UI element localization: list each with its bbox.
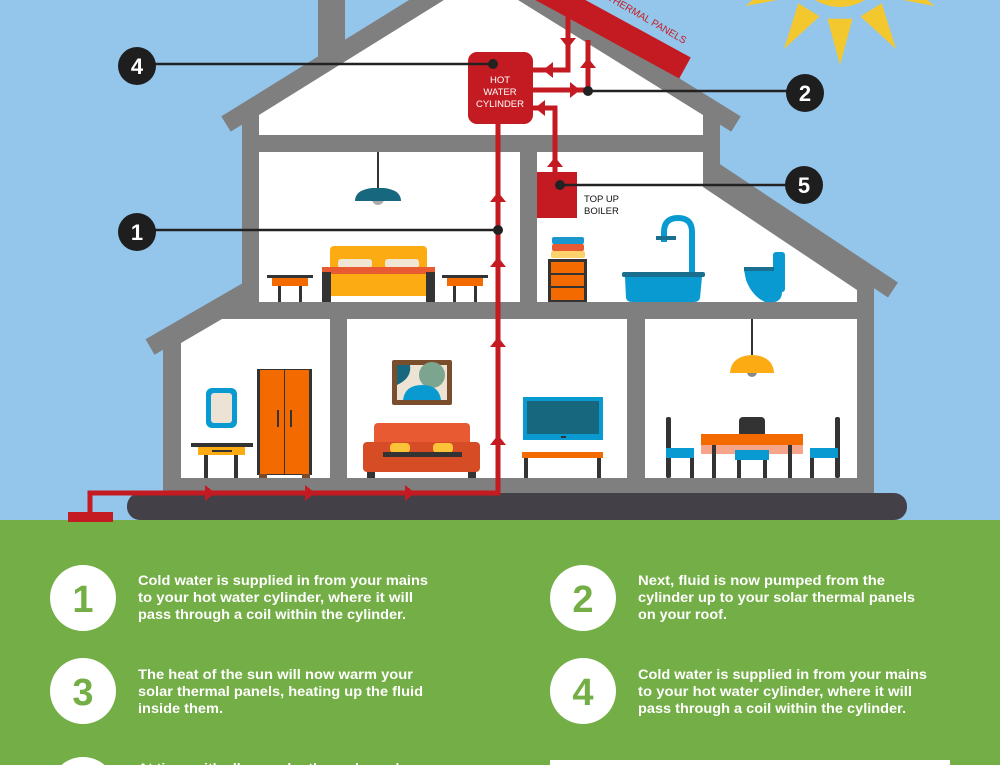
callout 2: 2 bbox=[799, 81, 811, 106]
hot water cylinder bbox=[468, 52, 533, 124]
top up boiler: BOILER bbox=[584, 206, 619, 217]
step 1: to your hot water cylinder, where it will bbox=[138, 589, 413, 605]
step 3 bbox=[50, 658, 423, 724]
callout 4: 4 bbox=[131, 54, 144, 79]
step 1: Cold water is supplied in from your mains bbox=[138, 572, 428, 588]
pipe arrows bbox=[205, 38, 596, 501]
icon: mirror bbox=[206, 388, 237, 428]
step 1 bbox=[50, 565, 428, 631]
pipes bbox=[90, 0, 588, 514]
icon: picture frame bbox=[392, 360, 452, 405]
icon: side table downstairs bbox=[191, 443, 253, 478]
step 1: 1 bbox=[72, 579, 94, 621]
foundation bar bbox=[127, 493, 907, 520]
icon: dining table and chairs bbox=[666, 417, 840, 478]
step 4: pass through a coil within the cylinder. bbox=[638, 700, 906, 716]
icon: wardrobe bbox=[257, 369, 312, 478]
step 4: Cold water is supplied in from your mains bbox=[638, 666, 927, 682]
step 3: solar thermal panels, heating up the fluid bbox=[138, 683, 423, 699]
step 2 bbox=[550, 565, 915, 631]
icon: ceiling lamp upstairs bbox=[355, 152, 401, 205]
icon: side tables bbox=[267, 275, 488, 302]
step 4: 4 bbox=[572, 672, 594, 714]
callout 1 bbox=[118, 213, 503, 251]
step 2: 2 bbox=[572, 579, 594, 621]
step 2: cylinder up to your solar thermal panels bbox=[638, 589, 915, 605]
icon: bathtub with shower bbox=[622, 218, 705, 302]
icon: sofa bbox=[363, 423, 480, 478]
step 3: 3 bbox=[72, 672, 94, 714]
hot water cylinder: CYLINDER bbox=[476, 99, 524, 110]
step 2: Next, fluid is now pumped from the bbox=[638, 572, 885, 588]
ground green bbox=[0, 520, 1000, 765]
step 4: to your hot water cylinder, where it will bbox=[638, 683, 912, 699]
icon: bed bbox=[322, 246, 435, 302]
icon: tv bbox=[522, 397, 603, 478]
callout 1: 1 bbox=[131, 220, 143, 245]
mains inlet block bbox=[68, 512, 113, 522]
hot water cylinder: HOT bbox=[490, 75, 510, 86]
callout 5: 5 bbox=[798, 173, 810, 198]
top up boiler bbox=[537, 172, 619, 218]
solar thermal panels bbox=[520, 0, 688, 68]
sky bbox=[0, 0, 1000, 520]
step 1: pass through a coil within the cylinder. bbox=[138, 606, 406, 622]
icon: sun bbox=[746, 0, 934, 65]
step 3: inside them. bbox=[138, 700, 223, 716]
callout 5 bbox=[555, 166, 823, 204]
callout 4 bbox=[118, 47, 498, 85]
step 4 bbox=[550, 658, 927, 724]
white box bottom right bbox=[550, 760, 950, 765]
top up boiler: TOP UP bbox=[584, 194, 619, 205]
icon: dresser with towels bbox=[548, 237, 587, 302]
icon: dining lamp bbox=[730, 319, 774, 377]
step 5 (cut off) bbox=[50, 757, 407, 765]
hot water cylinder: WATER bbox=[483, 87, 517, 98]
house bbox=[150, 0, 893, 494]
step 3: The heat of the sun will now warm your bbox=[138, 666, 414, 682]
icon: toilet bbox=[744, 252, 785, 302]
step 2: on your roof. bbox=[638, 606, 727, 622]
callout 2 bbox=[583, 74, 824, 112]
